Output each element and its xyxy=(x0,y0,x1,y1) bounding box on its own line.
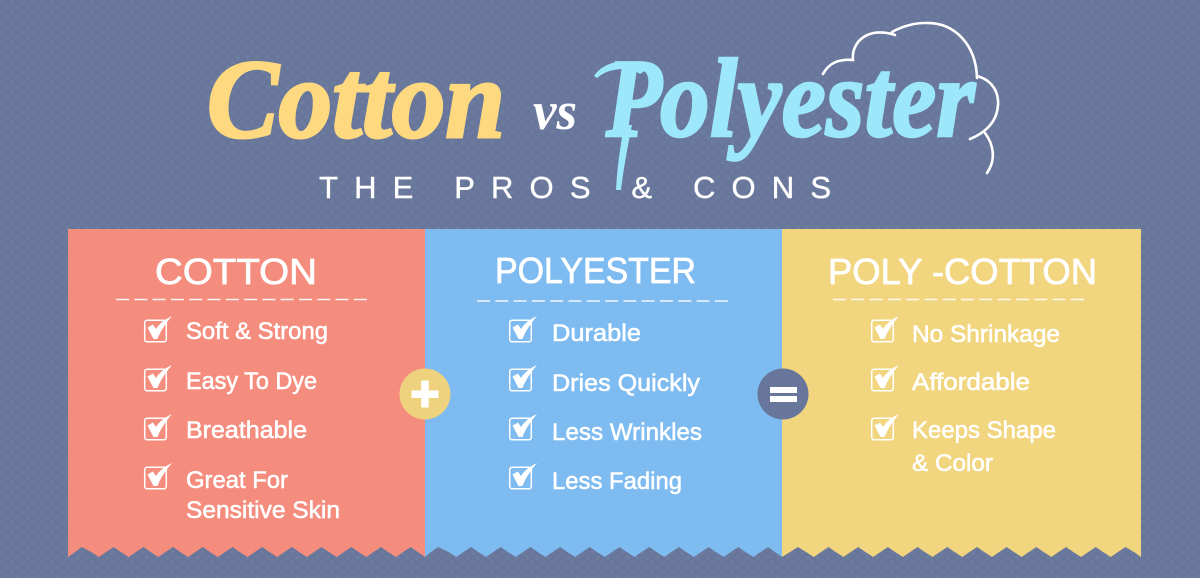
item: Great For Sensitive Skin xyxy=(145,463,340,524)
icon: plus circle xyxy=(400,368,450,420)
panel: poly-cotton xyxy=(782,229,1141,557)
icon: equals circle xyxy=(758,368,808,420)
divider dashes xyxy=(477,300,728,302)
item: Less Fading xyxy=(510,463,682,495)
item: Breathable xyxy=(145,414,307,444)
item: Less Wrinkles: Less Wrinkles xyxy=(552,419,702,446)
item: Easy To Dye: Easy To Dye xyxy=(186,368,317,395)
title word: Polyester xyxy=(594,37,976,190)
item: Durable: Durable xyxy=(552,320,641,347)
panel: polyester xyxy=(425,229,782,557)
title word: Polyester: olyester xyxy=(660,37,976,161)
item: Affordable xyxy=(872,365,1030,396)
heading: poly-cotton: POLY -COTTON xyxy=(828,251,1097,292)
item: Great For Sensitive Skin: Great For xyxy=(186,467,288,494)
title word: vs: vs xyxy=(533,81,577,141)
item: Great For Sensitive Skin: Sensitive Skin xyxy=(186,497,340,524)
icon: cotton cloud outline xyxy=(823,23,998,173)
panel background: poly-cotton xyxy=(782,229,1141,557)
heading: cotton: COTTON xyxy=(155,251,317,292)
item: Less Wrinkles xyxy=(510,414,702,446)
panel background: polyester xyxy=(425,229,782,557)
panel background: cotton xyxy=(68,229,425,557)
item: Affordable: Affordable xyxy=(912,369,1030,396)
item: No Shrinkage xyxy=(872,316,1060,348)
item: Dries Quickly xyxy=(510,365,700,397)
item: Less Fading: Less Fading xyxy=(552,468,682,495)
title word: Cotton: Cotton xyxy=(207,38,505,162)
title xyxy=(207,37,976,190)
divider dashes xyxy=(833,298,1085,300)
item: Durable xyxy=(510,316,641,347)
item: Breathable: Breathable xyxy=(186,417,307,444)
item: No Shrinkage: No Shrinkage xyxy=(912,321,1060,348)
title word: Polyester: P xyxy=(605,37,663,161)
item: Keeps Shape & Color: & Color xyxy=(912,450,993,477)
item: Keeps Shape & Color xyxy=(872,414,1056,477)
item: Soft & Strong: Soft & Strong xyxy=(186,318,328,345)
item: Dries Quickly: Dries Quickly xyxy=(552,370,700,397)
item: Keeps Shape & Color: Keeps Shape xyxy=(912,417,1056,444)
subtitle: THE PROS & CONS xyxy=(319,170,831,205)
heading: polyester: POLYESTER xyxy=(495,250,696,291)
panel: cotton xyxy=(68,229,425,557)
item: Easy To Dye xyxy=(145,365,317,395)
divider dashes xyxy=(116,298,367,300)
